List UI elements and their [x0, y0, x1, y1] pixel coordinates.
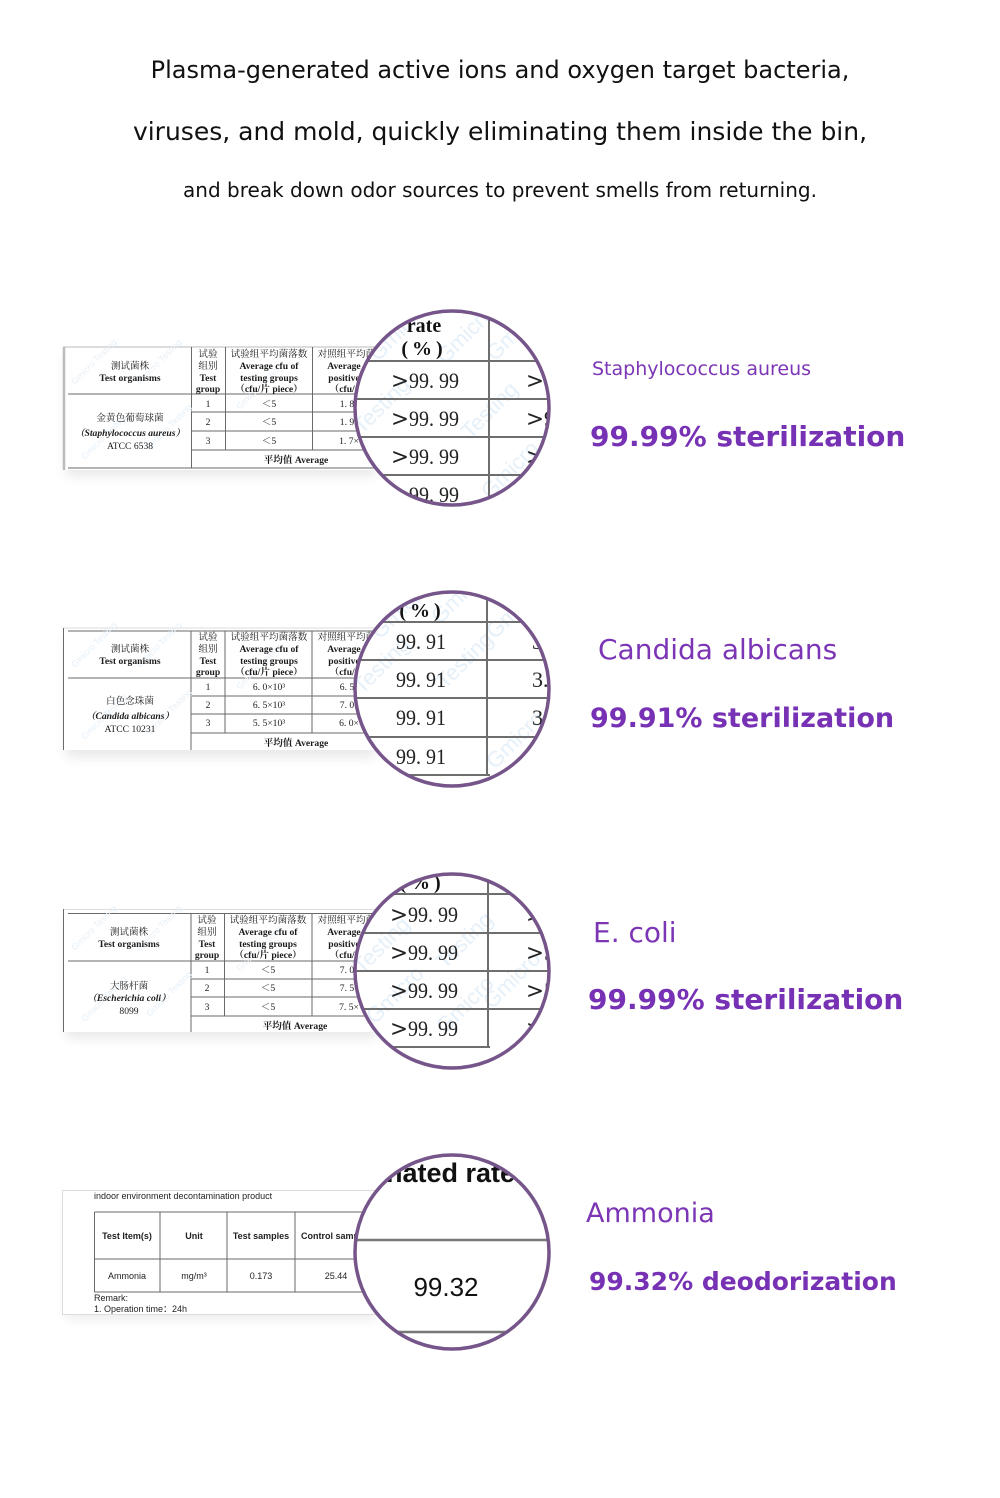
report table: Candida albicans: 6. 0×10³ [253, 682, 285, 693]
report table: Candida albicans: 测试菌株 [111, 643, 150, 655]
report table: E. coli: 对照组平均菌落数 [318, 914, 395, 926]
report table: Staphylococcus aureus: 组别 [198, 360, 218, 372]
report table: Ammonia [62, 1190, 383, 1319]
report table: Staphylococcus aureus: （cfu/片 [330, 383, 365, 395]
report table: E. coli: Gmicro Testing [69, 903, 119, 952]
report table: Staphylococcus aureus: （Staphylococcus aureus） [75, 427, 185, 439]
report table: Candida albicans: 试验组平均菌落数 [231, 631, 308, 643]
magnifier: E. coli: 99. 99 [408, 940, 458, 965]
report table: E. coli: 试验组平均菌落数 [230, 914, 307, 926]
report table: E. coli: （cfu/片 [330, 949, 365, 961]
report table: Candida albicans: 3 [206, 718, 211, 729]
magnifier: E. coli: > [390, 903, 408, 928]
report table: E. coli: ＜5 [261, 983, 275, 994]
magnifier: Staphylococcus aureus: Testing [456, 377, 523, 444]
magnifier: Candida albicans: Testing [431, 627, 498, 694]
magnifier: E. coli: 99. 99 [408, 1016, 458, 1041]
magnifier: E. coli: 5 [544, 978, 555, 1003]
result: 99.99% sterilization: 99.99% sterilization [588, 983, 903, 1016]
report table: Ammonia: indoor environment decontamination product [94, 1191, 273, 1201]
report table: E. coli: Test organisms [98, 939, 160, 950]
magnifier: Candida albicans: 99. 91 [396, 705, 446, 730]
magnifier: Staphylococcus aureus: > [526, 407, 544, 432]
magnifier: E. coli [348, 865, 555, 1068]
report table: E. coli: 2 [205, 983, 210, 994]
magnifier: E. coli: > [390, 979, 408, 1004]
magnifier: E. coli: > [390, 941, 408, 966]
report table: Candida albicans: Gmicro Testing [134, 620, 184, 669]
label: E. coli: E. coli [593, 916, 677, 949]
report table: Staphylococcus aureus: 金黄色葡萄球菌 [96, 412, 164, 424]
report table: Staphylococcus aureus: Gmicro Testing [69, 337, 119, 386]
report table: E. coli: 7. 0 [340, 965, 354, 976]
magnifier: Staphylococcus aureus: (%) [401, 338, 447, 360]
title: intro text: and break down odor sources to prevent smells from returning. [183, 178, 817, 202]
report table: Staphylococcus aureus [63, 337, 395, 476]
report table: Candida albicans: （cfu/片 [330, 666, 365, 678]
report table: Candida albicans: group [196, 667, 220, 678]
magnifier: Candida albicans: 3 [532, 629, 543, 654]
report table: Ammonia: 25.44 [325, 1271, 347, 1281]
report table: Candida albicans: 7. 0 [340, 700, 354, 711]
report table: E. coli: Gmicro Testing [144, 969, 194, 1018]
report table: Staphylococcus aureus: （cfu/片 piece） [235, 383, 303, 395]
magnifier: E. coli: Gmicro [361, 961, 429, 1029]
report table: Candida albicans: 5. 5×10³ [253, 718, 285, 729]
report table: Candida albicans: 1 [206, 682, 211, 693]
magnifier: E. coli: (%) [399, 872, 445, 894]
report table: Staphylococcus aureus: Average [327, 361, 361, 372]
magnifier: Candida albicans [353, 590, 551, 788]
report table: E. coli: 8099 [119, 1006, 139, 1017]
magnifier: Candida albicans: Gmicro [481, 706, 549, 774]
magnifier: Staphylococcus aureus: > [391, 445, 409, 470]
report table: Ammonia: Test samples [233, 1231, 289, 1241]
report table: Candida albicans: （Candida albicans） [86, 710, 174, 722]
report table: Staphylococcus aureus: ＜5 [262, 399, 276, 410]
report table: Candida albicans: Test [200, 656, 217, 667]
report table: E. coli: Gmicro Testing [234, 924, 284, 973]
magnifier: Candida albicans: Testing [348, 632, 415, 699]
report table: Candida albicans: testing groups [240, 656, 298, 667]
magnifier: Staphylococcus aureus: 99. 99 [409, 444, 459, 469]
report table: E. coli [63, 903, 395, 1038]
report table: Ammonia: mg/m³ [181, 1271, 207, 1281]
magnifier: E. coli: Gmicro [478, 946, 546, 1014]
report table: E. coli: 试验 [197, 914, 217, 926]
magnifier: Staphylococcus aureus: Gmicro [481, 298, 549, 366]
report table: Ammonia: Test Item(s) [102, 1231, 152, 1241]
magnifier: E. coli: 99. 99 [408, 978, 458, 1003]
magnifier: Staphylococcus aureus: 9 [544, 406, 555, 431]
report table: E. coli: （cfu/片 piece） [234, 949, 302, 961]
magnifier: Candida albicans: 99. 91 [396, 629, 446, 654]
report table: Candida albicans [63, 620, 395, 757]
magnifier: Staphylococcus aureus: > [526, 369, 544, 394]
report table: E. coli: Gmicro Testing [79, 974, 129, 1023]
report table: E. coli: Average [327, 927, 361, 938]
report table: Staphylococcus aureus: Gmicro Testing [234, 362, 284, 411]
report table: Candida albicans: （cfu/片 piece） [235, 666, 303, 678]
report table: Staphylococcus aureus: 2 [206, 417, 211, 428]
report table: Ammonia: 1. Operation time：24h [94, 1304, 187, 1314]
report table: Staphylococcus aureus: testing groups [240, 373, 298, 384]
magnifier: Staphylococcus aureus: 99. 99 [409, 368, 459, 393]
report table: Candida albicans: Gmicro Testing [234, 642, 284, 691]
magnifier: E. coli: > [526, 941, 544, 966]
magnifier: E. coli: 5 [544, 940, 555, 965]
report table: Staphylococcus aureus: 1. 8 [340, 399, 354, 410]
report table: Staphylococcus aureus: group [196, 384, 220, 395]
report table: Ammonia: Ammonia [108, 1271, 146, 1281]
report table: Staphylococcus aureus: 3 [206, 436, 211, 447]
report table: E. coli: 3 [205, 1002, 210, 1013]
magnifier: Ammonia [353, 1153, 551, 1351]
report table: Staphylococcus aureus: 试验 [198, 348, 218, 360]
report table: Staphylococcus aureus: Average cfu of [240, 361, 299, 372]
report table: Candida albicans: 6. 5×10³ [253, 700, 285, 711]
magnifier: Candida albicans: Gmicro [481, 576, 549, 644]
magnifier: Candida albicans: 99. 91 [396, 667, 446, 692]
report table: Ammonia: Remark: [94, 1293, 128, 1303]
panel: E. coli [63, 865, 903, 1068]
magnifier: Candida albicans: Gmicro [366, 576, 434, 644]
report table: Ammonia: Control samples [301, 1231, 372, 1241]
magnifier: E. coli: > [526, 979, 544, 1004]
report table: Staphylococcus aureus: 试验组平均菌落数 [231, 348, 308, 360]
magnifier: E. coli: 99. 99 [408, 902, 458, 927]
report table: E. coli: ＜5 [261, 1002, 275, 1013]
report table: Candida albicans: 平均值 Average [264, 737, 329, 749]
report table: Staphylococcus aureus: 1 [206, 399, 211, 410]
report table: E. coli: group [195, 950, 219, 961]
report table: E. coli: 7. 5 [340, 983, 354, 994]
magnifier: E. coli: Testing [348, 912, 415, 979]
magnifier: E. coli: > [526, 1017, 544, 1042]
magnifier: Ammonia: Eliminated rate [321, 1158, 515, 1188]
report table: Staphylococcus aureus: 对照组平均菌落数 [318, 348, 395, 360]
title: intro text: viruses, and mold, quickly eliminating them inside the bin, [133, 117, 867, 146]
report table: Candida albicans: ATCC 10231 [105, 724, 156, 735]
report table: Candida albicans: 对照组平均菌落数 [318, 631, 395, 643]
report table: Candida albicans: 试验 [198, 631, 218, 643]
magnifier: Staphylococcus aureus: Gmicro [476, 436, 544, 504]
magnifier: Candida albicans: 99. 91 [396, 744, 446, 769]
report table: Staphylococcus aureus: positive [328, 373, 360, 384]
magnifier: Candida albicans: 3. [532, 667, 548, 692]
report table: Staphylococcus aureus: 测试菌株 [111, 360, 150, 372]
report table: Candida albicans: Average [327, 644, 361, 655]
report table: E. coli: 平均值 Average [263, 1020, 328, 1032]
report table: E. coli: 7. 5× [339, 1002, 359, 1013]
magnifier: Staphylococcus aureus: 99. 99 [409, 482, 459, 507]
report table: Candida albicans: 白色念珠菌 [106, 695, 154, 707]
panel: Staphylococcus aureus [63, 298, 905, 510]
label: Candida albicans: Candida albicans [598, 633, 837, 666]
label: Staphylococcus aureus: Staphylococcus aureus [592, 358, 811, 380]
magnifier: Candida albicans: Gmicro [426, 561, 494, 629]
report table: Candida albicans: Test organisms [99, 656, 161, 667]
report table: Candida albicans: Gmicro Testing [69, 620, 119, 669]
title: intro text [133, 56, 867, 202]
report table: Staphylococcus aureus: Test [200, 373, 217, 384]
report table: E. coli: 测试菌株 [110, 926, 149, 938]
report table: E. coli: positive [328, 939, 360, 950]
magnifier: Candida albicans: (%) [399, 600, 445, 622]
result: 99.32% deodorization: 99.32% deodorization [589, 1267, 897, 1296]
report table: Candida albicans: 6. 0× [339, 718, 359, 729]
magnifier: Staphylococcus aureus: > [391, 407, 409, 432]
report table: E. coli: 大肠杆菌 [110, 980, 149, 992]
report table: Staphylococcus aureus: 平均值 Average [264, 454, 329, 466]
report table: Staphylococcus aureus: ATCC 6538 [107, 441, 153, 452]
report table: Staphylococcus aureus: Gmicro Testing [79, 412, 129, 461]
magnifier: Staphylococcus aureus: rate [407, 315, 441, 337]
magnifier: E. coli: > [390, 1017, 408, 1042]
magnifier: Staphylococcus aureus: 99. 99 [409, 406, 459, 431]
report table: Candida albicans: 6. 5 [340, 682, 354, 693]
report table: Staphylococcus aureus: ＜5 [262, 436, 276, 447]
report table: Staphylococcus aureus: 1. 7× [339, 436, 359, 447]
report table: E. coli: 1 [205, 965, 210, 976]
report table: Staphylococcus aureus: Test organisms [99, 373, 161, 384]
report table: Candida albicans: Gmicro Testing [79, 692, 129, 741]
magnifier: E. coli: > [526, 903, 544, 928]
magnifier: Staphylococcus aureus: > [526, 445, 544, 470]
report table: Candida albicans: 组别 [198, 643, 218, 655]
report table: Staphylococcus aureus: 1. 9 [340, 417, 354, 428]
magnifier: Staphylococcus aureus: Gmicro [364, 298, 432, 366]
magnifier: Candida albicans: 3 [532, 705, 543, 730]
magnifier: Staphylococcus aureus [353, 309, 551, 507]
magnifier: Ammonia: 99.32 [413, 1272, 479, 1302]
report table: E. coli: ＜5 [261, 965, 275, 976]
report table: Candida albicans: Gmicro Testing [144, 687, 194, 736]
magnifier: Staphylococcus aureus: Testing [348, 372, 415, 439]
label: Ammonia: Ammonia [586, 1198, 715, 1229]
report table: E. coli: （Escherichia coli） [87, 992, 171, 1004]
magnifier: Staphylococcus aureus: > [391, 369, 409, 394]
panel: Candida albicans [63, 590, 892, 788]
report table: Staphylococcus aureus: ＜5 [262, 417, 276, 428]
magnifier: E. coli: Gmicro [431, 971, 499, 1039]
report table: Ammonia: Unit [185, 1231, 203, 1241]
report table: E. coli: Average cfu of [239, 927, 298, 938]
report table: Staphylococcus aureus: Gmicro Testing [144, 402, 194, 451]
panel: Ammonia [62, 1155, 897, 1349]
result: 99.99% sterilization: 99.99% sterilization [590, 420, 905, 453]
report table: Ammonia: 0.173 [250, 1271, 272, 1281]
title: intro text: Plasma-generated active ions and oxygen target bacteria, [151, 56, 849, 84]
result: 99.91% sterilization: 99.91% sterilization [590, 703, 894, 734]
report table: E. coli: 组别 [197, 926, 217, 938]
report table: Candida albicans: Average cfu of [240, 644, 299, 655]
report table: E. coli: testing groups [239, 939, 297, 950]
report table: E. coli: Test [199, 939, 216, 950]
magnifier: E. coli: Testing [431, 907, 498, 974]
report table: E. coli: Gmicro Testing [134, 903, 184, 952]
magnifier: Staphylococcus aureus: Gmicro [431, 301, 499, 369]
report table: Staphylococcus aureus: Gmicro Testing [134, 337, 184, 386]
report table: Candida albicans: 2 [206, 700, 211, 711]
report table: Candida albicans: positive [328, 656, 360, 667]
